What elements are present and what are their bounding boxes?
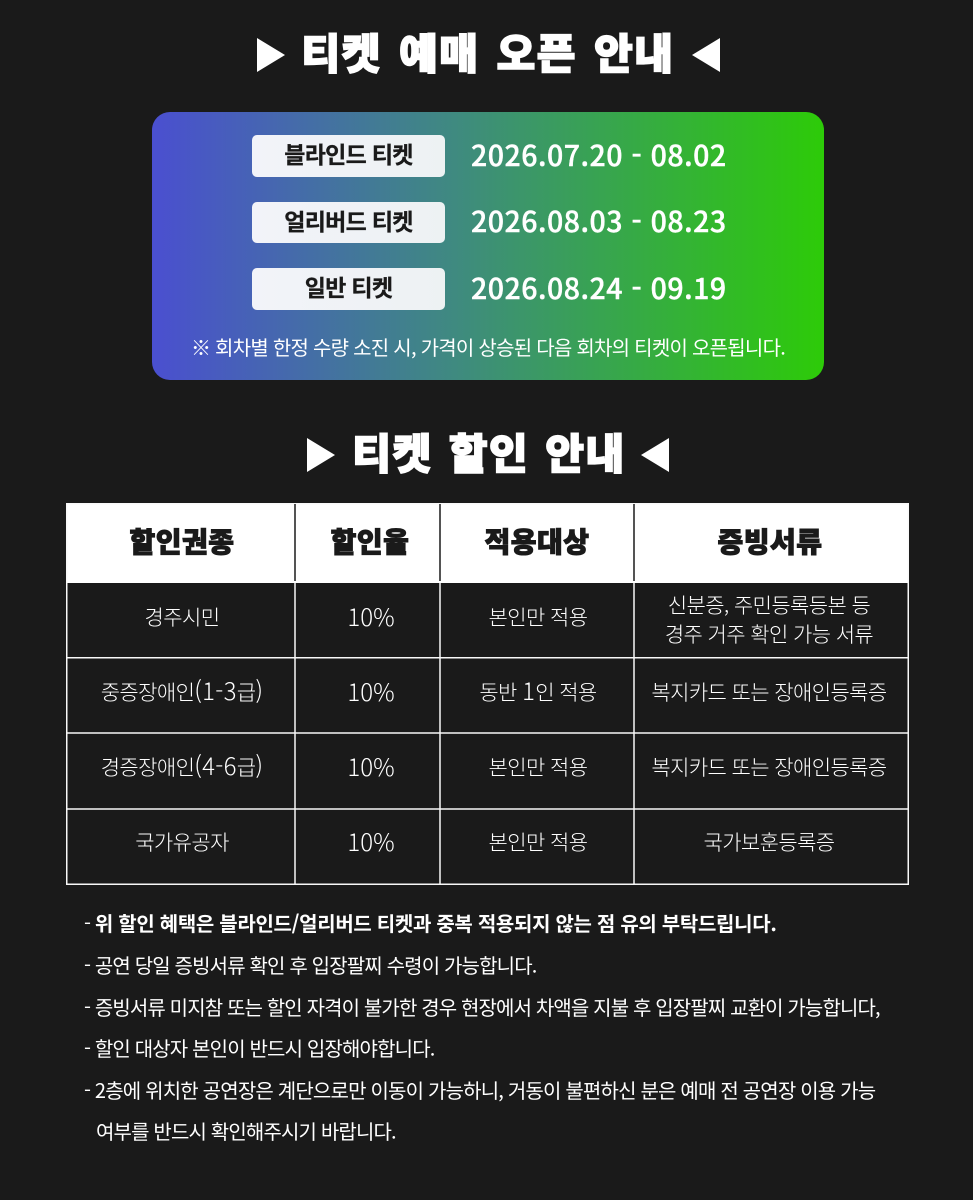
tag: general ticket: 일반 티켓 <box>305 269 392 303</box>
title: ticket open <box>257 21 720 82</box>
row 3 target: 본인만 적용 <box>489 752 587 782</box>
row 4 rate: 10% <box>347 823 395 858</box>
note 5 continued: 여부를 반드시 확인해주시기 바랍니다. <box>96 1116 396 1145</box>
note 4: - 할인 대상자 본인이 반드시 입장해야합니다. <box>84 1033 434 1062</box>
row 1 rate: 10% <box>347 598 395 632</box>
icon: right arrow <box>307 438 335 472</box>
schedule note: ※ 회차별 한정 수량 소진 시, 가격이 상승된 다음 회차의 티켓이 오픈됩니다. <box>191 332 785 361</box>
note 2: - 공연 당일 증빙서류 확인 후 입장팔찌 수령이 가능합니다. <box>84 950 536 979</box>
header: rate: 할인율 <box>331 521 409 561</box>
row 2 type: 중증장애인(1-3급) <box>101 672 263 707</box>
row 4 documents: 국가보훈등록증 <box>703 827 835 857</box>
tag: blind ticket <box>252 135 445 176</box>
row 1 target: 본인만 적용 <box>489 602 587 632</box>
tag: blind ticket: 블라인드 티켓 <box>284 136 413 170</box>
icon: left arrow <box>692 38 720 72</box>
header: type: 할인권종 <box>129 521 235 561</box>
date: blind ticket: 2026.07.20 - 08.02 <box>471 134 727 175</box>
tag: early bird ticket <box>252 202 445 243</box>
row 3 type: 경증장애인(4-6급) <box>101 747 263 782</box>
row 1 documents: 신분증, 주민등록등본 등 <box>668 590 870 620</box>
tag: general ticket <box>252 268 445 310</box>
notes <box>84 908 880 1145</box>
row 1 documents <box>665 590 873 648</box>
icon: left arrow <box>641 438 669 472</box>
row 2 rate: 10% <box>347 672 395 708</box>
header: target: 적용대상 <box>484 521 590 561</box>
title text: 티켓 할인 안내 <box>352 421 626 482</box>
icon: right arrow <box>257 38 285 72</box>
panel: ticket schedule <box>152 112 824 380</box>
row 1 type: 경주시민 <box>145 602 219 632</box>
table: discount <box>66 503 909 885</box>
note 1: - 위 할인 혜택은 블라인드/얼리버드 티켓과 중복 적용되지 않는 점 유의 부탁드립니다. <box>84 908 777 936</box>
row 2 documents: 복지카드 또는 장애인등록증 <box>651 677 887 707</box>
tag: early bird ticket: 얼리버드 티켓 <box>284 202 413 236</box>
title: ticket discount <box>307 421 669 482</box>
row 4 target: 본인만 적용 <box>489 827 587 857</box>
row 2 target: 동반 1인 적용 <box>479 672 597 707</box>
row 1 documents: 경주 거주 확인 가능 서류 <box>665 618 873 648</box>
date: early bird ticket: 2026.08.03 - 08.23 <box>471 200 727 241</box>
row 4 type: 국가유공자 <box>135 827 229 857</box>
row 3 documents: 복지카드 또는 장애인등록증 <box>651 752 887 782</box>
header: documents: 증빙서류 <box>717 521 823 561</box>
title text: 티켓 예매 오픈 안내 <box>302 21 674 82</box>
note 5: - 2층에 위치한 공연장은 계단으로만 이동이 가능하니, 거동이 불편하신 분은 예매 전 공연장 이용 가능 <box>84 1075 875 1104</box>
row 3 rate: 10% <box>347 748 395 783</box>
date: general ticket: 2026.08.24 - 09.19 <box>471 267 727 308</box>
note 3: - 증빙서류 미지참 또는 할인 자격이 불가한 경우 현장에서 차액을 지불 후 입장팔찌 교환이 가능합니다, <box>84 992 880 1021</box>
